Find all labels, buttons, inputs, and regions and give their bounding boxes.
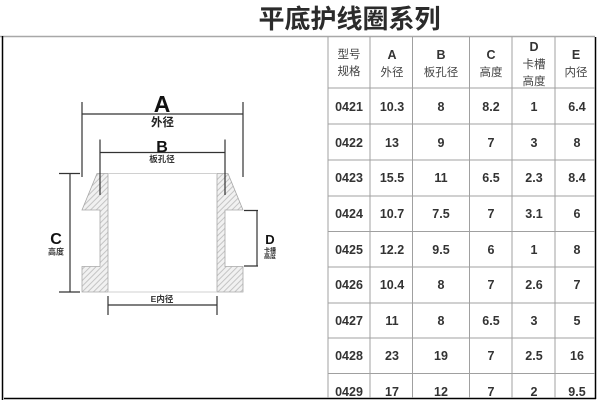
right wall section <box>217 174 243 292</box>
row 0421: 8 <box>438 100 445 114</box>
diagram: grommet cross-section <box>48 91 276 315</box>
row 0425: 6 <box>488 243 495 257</box>
row 0428: 2.5 <box>525 349 543 363</box>
row 0424: 6 <box>574 207 581 221</box>
row 0429: 17 <box>385 385 399 399</box>
row 0422: 0422 <box>335 136 363 150</box>
row 0424: 3.1 <box>525 207 543 221</box>
dimension A <box>82 91 243 177</box>
row 0425: 1 <box>531 243 538 257</box>
row 0426: 2.6 <box>525 278 543 292</box>
table header <box>338 40 588 88</box>
row 0428 <box>335 349 584 363</box>
dimension B: 板孔径 <box>149 154 175 164</box>
row 0425: 9.5 <box>432 243 450 257</box>
dimension D: D <box>265 232 275 247</box>
row 0423: 8.4 <box>568 171 586 185</box>
row 0428: 16 <box>570 349 584 363</box>
row 0422: 7 <box>488 136 495 150</box>
row 0424 <box>335 207 581 221</box>
dimension A: A <box>154 91 170 117</box>
row 0422 <box>335 136 581 150</box>
table header: 规格 <box>338 64 361 78</box>
row 0421 <box>335 100 586 114</box>
row 0421: 0421 <box>335 100 363 114</box>
row 0426: 8 <box>438 278 445 292</box>
table grid <box>328 37 595 398</box>
spec table <box>328 37 595 399</box>
dimension D: 卡槽 <box>264 246 276 254</box>
dimension A: 外径 <box>151 115 174 129</box>
row 0428: 19 <box>434 349 448 363</box>
row 0428: 0428 <box>335 349 363 363</box>
row 0425 <box>335 243 581 257</box>
row 0429: 2 <box>531 385 538 399</box>
row 0422: 13 <box>385 136 399 150</box>
table header: 内径 <box>564 65 588 79</box>
table header: 高度 <box>480 65 503 79</box>
row 0426: 7 <box>574 278 581 292</box>
row 0426: 7 <box>488 278 495 292</box>
row 0421: 1 <box>531 100 538 114</box>
table header: E <box>572 48 580 62</box>
table header: 卡槽 <box>522 58 546 71</box>
row 0429: 0429 <box>335 385 363 399</box>
dimension C: 高度 <box>48 246 64 256</box>
row 0428: 23 <box>385 349 399 363</box>
row 0421: 8.2 <box>482 100 500 114</box>
table header: 型号 <box>338 47 360 61</box>
dimension D: 高度 <box>264 252 276 260</box>
table header: 板孔径 <box>424 65 458 79</box>
row 0429: 12 <box>434 385 448 399</box>
table header: C <box>486 48 496 62</box>
row 0424: 7.5 <box>432 207 450 221</box>
row 0423: 6.5 <box>482 171 500 185</box>
row 0427: 6.5 <box>482 314 500 328</box>
row 0421: 6.4 <box>568 100 586 114</box>
row 0422: 3 <box>531 136 538 150</box>
title: 平底护线圈系列 <box>258 4 441 34</box>
row 0427: 5 <box>574 314 581 328</box>
row 0427: 3 <box>531 314 538 328</box>
table header: 高度 <box>522 74 546 88</box>
row 0422: 9 <box>438 136 445 150</box>
row 0427: 8 <box>438 314 445 328</box>
row 0426: 10.4 <box>380 278 404 292</box>
dimension E <box>108 294 217 315</box>
row 0428: 7 <box>488 349 495 363</box>
row 0423: 15.5 <box>380 171 404 185</box>
table header: B <box>436 48 446 62</box>
row 0429: 7 <box>488 385 495 399</box>
left wall section <box>82 174 108 292</box>
row 0424: 7 <box>488 207 495 221</box>
dimension B: B <box>156 139 168 156</box>
row 0423: 0423 <box>335 171 363 185</box>
row 0427: 11 <box>385 314 399 328</box>
row 0424: 10.7 <box>380 207 404 221</box>
dimension D <box>244 210 276 266</box>
row 0424: 0424 <box>335 207 363 221</box>
row 0429: 9.5 <box>568 385 586 399</box>
row 0423: 2.3 <box>525 171 543 185</box>
row 0427 <box>335 314 581 328</box>
table header: A <box>387 48 397 62</box>
row 0422: 8 <box>574 136 581 150</box>
row 0425: 0425 <box>335 243 363 257</box>
row 0423 <box>335 171 586 185</box>
row 0425: 12.2 <box>380 243 404 257</box>
row 0427: 0427 <box>335 314 363 328</box>
row 0423: 11 <box>434 171 448 185</box>
row 0429 <box>335 385 586 399</box>
dimension E: E内径 <box>151 294 174 304</box>
table header: D <box>529 40 539 54</box>
dimension C <box>48 174 80 292</box>
row 0426 <box>335 278 581 292</box>
row 0426: 0426 <box>335 278 363 292</box>
row 0421: 10.3 <box>380 100 404 114</box>
table header: 外径 <box>380 66 404 79</box>
row 0425: 8 <box>574 243 581 257</box>
dimension C: C <box>50 231 62 248</box>
dimension B <box>100 139 225 195</box>
